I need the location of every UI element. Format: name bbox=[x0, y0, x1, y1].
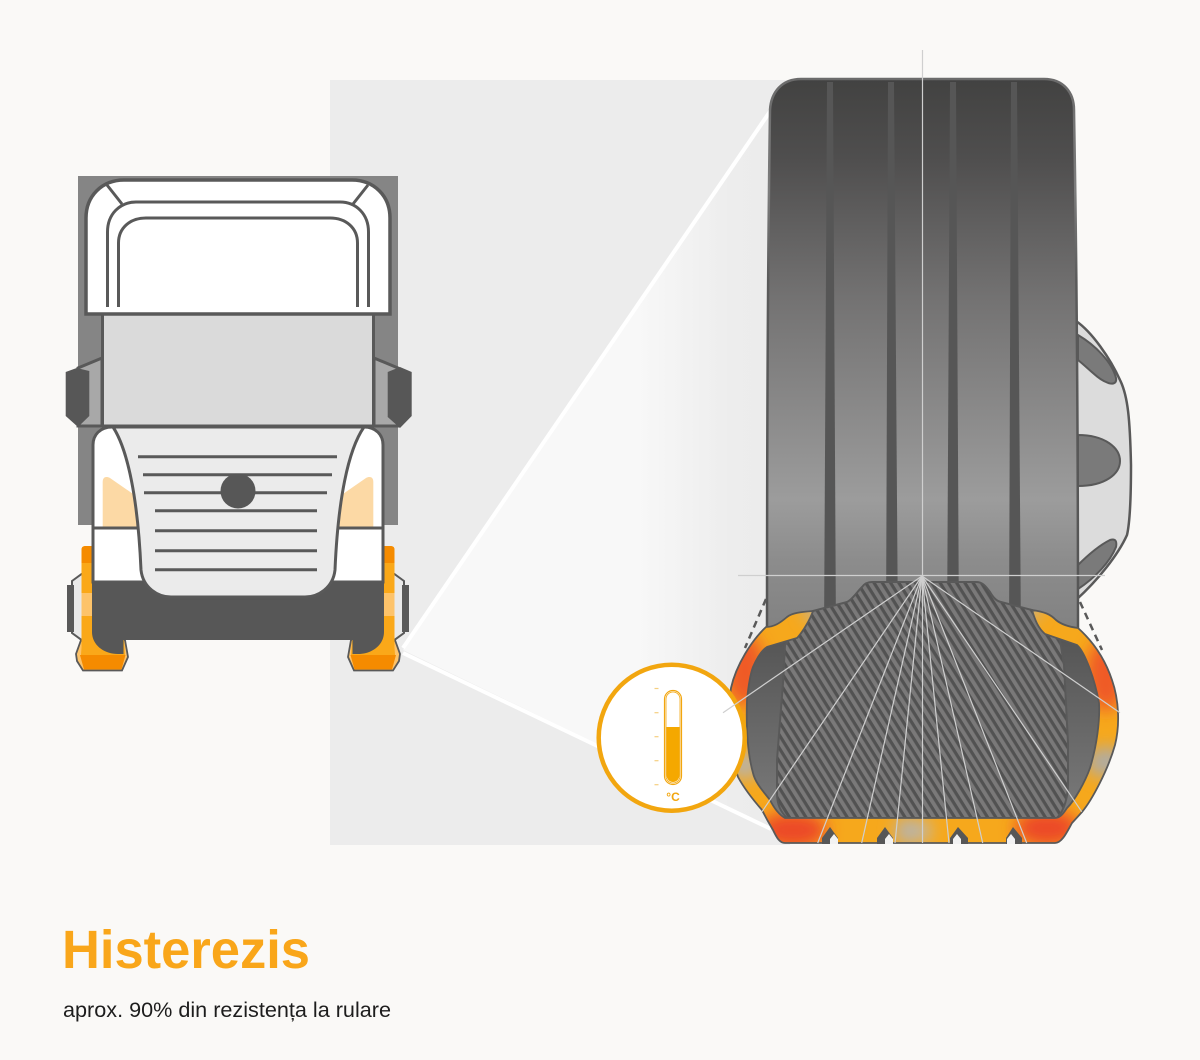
rim opening bottom bbox=[1078, 539, 1116, 589]
tread notches bbox=[822, 827, 1022, 844]
title: Histerezis bbox=[62, 920, 310, 980]
tread grooves bbox=[824, 82, 1021, 640]
subtitle: aprox. 90% din rezistența la rulare bbox=[63, 999, 391, 1022]
cross-section outline bbox=[729, 610, 1118, 843]
truck grey panel bbox=[102, 312, 374, 426]
rim opening top bbox=[1078, 335, 1116, 384]
zoom panel bbox=[330, 80, 790, 845]
truck grille bbox=[113, 427, 364, 597]
thermometer icon bbox=[654, 688, 682, 804]
truck front view bbox=[66, 176, 412, 670]
hatched inner layer bbox=[777, 582, 1068, 818]
dashed sidewall lines bbox=[745, 599, 1102, 650]
heat band bbox=[731, 612, 1118, 842]
truck left tyre bbox=[76, 546, 128, 670]
thermometer callout bbox=[599, 665, 745, 811]
rim opening middle bbox=[1078, 435, 1120, 486]
truck rear box bbox=[78, 176, 398, 525]
truck windshield bbox=[86, 180, 390, 314]
center lines and radial lines bbox=[723, 50, 1120, 843]
tyre tread view bbox=[767, 79, 1078, 640]
tyre cross-section bbox=[720, 582, 1130, 850]
wheel rim bbox=[1076, 321, 1131, 600]
truck hubs bbox=[67, 573, 409, 641]
truck right tyre bbox=[348, 546, 400, 670]
thermometer icon: °C bbox=[666, 790, 680, 804]
truck mirrors bbox=[66, 358, 412, 428]
tyre cavity bbox=[729, 610, 1118, 843]
truck cab body bbox=[92, 427, 384, 654]
